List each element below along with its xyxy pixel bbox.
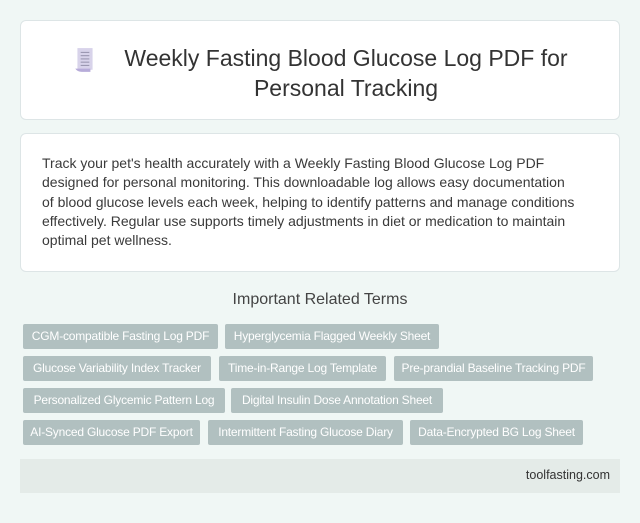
footer <box>20 459 620 493</box>
description text <box>42 155 574 248</box>
tags: Glucose Variability Index Tracker <box>33 361 201 375</box>
tags: Intermittent Fasting Glucose Diary <box>218 425 393 439</box>
icon: document <box>75 48 92 72</box>
tags: Data-Encrypted BG Log Sheet <box>418 425 575 439</box>
related terms heading: Important Related Terms <box>233 291 407 308</box>
tags: AI-Synced Glucose PDF Export <box>30 425 193 439</box>
tags: Hyperglycemia Flagged Weekly Sheet <box>234 329 430 343</box>
tags: Digital Insulin Dose Annotation Sheet <box>242 393 432 407</box>
tags: Personalized Glycemic Pattern Log <box>34 393 214 407</box>
tags: Pre-prandial Baseline Tracking PDF <box>402 361 585 375</box>
description panel <box>20 133 620 272</box>
description text: Track your pet's health accurately with a Weekly Fasting Blood Glucose Log PDF designed for personal monitoring. This downloadable log allows easy documentation <box>42 155 565 190</box>
footer source text: toolfasting.com <box>526 468 610 482</box>
tags: Time-in-Range Log Template <box>228 361 377 375</box>
title: Weekly Fasting Blood Glucose Log PDF for Personal Tracking <box>124 45 568 101</box>
description text: of blood glucose levels each week, helping to identify patterns and manage conditions effectively. Regular use supports timely adjustments in diet or medication to maintain optimal pet wellness. <box>42 194 574 248</box>
header panel <box>20 20 620 120</box>
tags: CGM-compatible Fasting Log PDF <box>32 329 209 343</box>
